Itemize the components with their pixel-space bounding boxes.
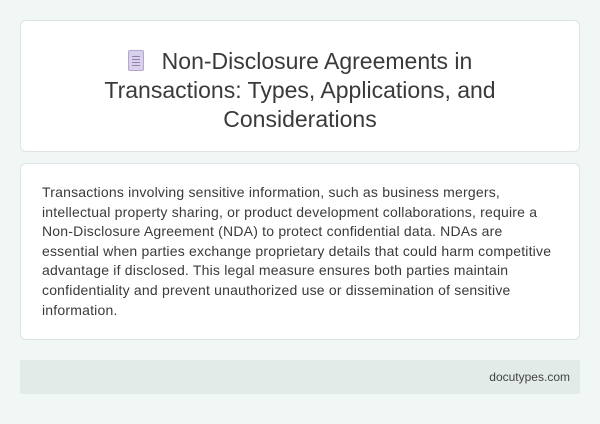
footer bar	[20, 360, 580, 394]
description: Transactions involving sensitive information, such as business mergers,	[42, 184, 500, 200]
footer: source: docutypes.com	[489, 370, 570, 384]
description: intellectual property sharing, or product development collaborations, require a	[42, 204, 537, 220]
description: information.	[42, 302, 118, 318]
title: Transactions: Types, Applications, and	[104, 77, 496, 103]
title: Considerations	[223, 106, 377, 132]
body text panel	[20, 163, 580, 340]
description: essential when parties exchange proprietary details that could harm competitive	[42, 243, 551, 259]
icon: document	[128, 50, 144, 71]
description: confidentiality and prevent unauthorized use or dissemination of sensitive	[42, 282, 511, 298]
title: Non-Disclosure Agreements in	[162, 48, 472, 74]
header card	[20, 20, 580, 152]
description: Non-Disclosure Agreement (NDA) to protect confidential data. NDAs are	[42, 223, 502, 239]
description	[42, 184, 551, 318]
description: advantage if disclosed. This legal measure ensures both parties maintain	[42, 262, 508, 278]
title	[104, 48, 496, 132]
